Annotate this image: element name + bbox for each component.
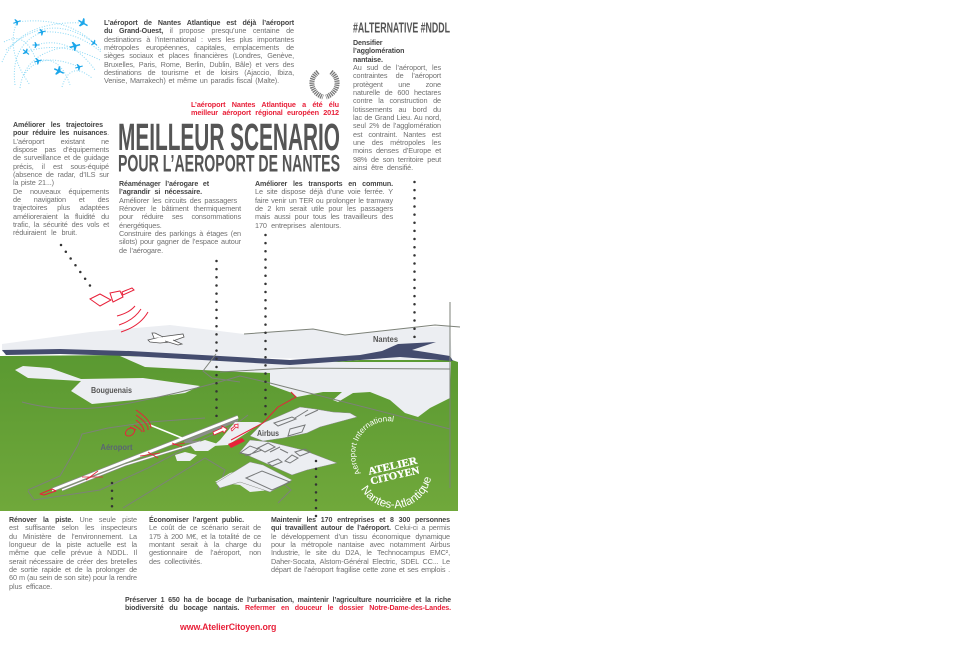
text: aérogare: Réaménager l’aérogare et	[119, 180, 209, 188]
map: radar icon	[124, 410, 151, 438]
text: trajectoires: trafic, la sécurité des vols et	[13, 220, 109, 229]
text: aérogare: Améliorer les circuits des passagers	[119, 196, 237, 205]
leader line: densifier	[413, 182, 416, 338]
map: north bank land	[2, 325, 452, 362]
leader line: transports	[264, 235, 267, 416]
text: trajectoires: L’aéroport existant ne	[13, 137, 109, 146]
text: best airport award: meilleur aéroport régional européen 2012	[191, 108, 339, 117]
text: aérogare: de l’aérogare.	[119, 246, 163, 255]
leader line: piste	[111, 483, 113, 514]
text: aérogare: énergétiques.	[119, 221, 162, 230]
text: Grand-Ouest airport	[104, 19, 294, 85]
text: website: www.AtelierCitoyen.org	[180, 622, 276, 632]
label: Nantes: Nantes	[373, 335, 399, 344]
text: trajectoires: pour réduire les nuisances.	[13, 128, 109, 137]
text: transports: Améliorer les transports en commun.	[255, 180, 393, 188]
text: piste	[9, 515, 138, 591]
text: densifier: protègent une zone	[353, 80, 441, 89]
text: Grand-Ouest airport: destinations à l’international : vers les plus importantes	[104, 35, 294, 44]
text: densifier: lac de Grand Lieu. Au nord,	[353, 113, 441, 122]
text: argent public: gestionnaire de l’aéroport, non	[149, 548, 261, 557]
map: business park	[240, 440, 337, 475]
text: Grand-Ouest airport: Bruxelles, Paris, Rome, Berlin, Dublin, Bâle) et vers des	[104, 60, 294, 69]
title: MEILLEUR SCENARIO	[118, 117, 340, 159]
text: Grand-Ouest airport: destinations de tourisme et de loisirs (Ajaccio, Ibiza,	[104, 68, 294, 77]
text: densifier: 98% de son territoire peut	[353, 155, 441, 164]
text: Grand-Ouest airport: Venise, Marrakech) et même un paradis fiscal (Malte).	[104, 76, 279, 85]
map: urban area south of river	[120, 356, 451, 417]
text: piste: du Ministère de l’environnement. La	[9, 532, 137, 541]
text: piste: serait nécessaire de créer des bretelles	[9, 557, 137, 566]
icon: satellite	[90, 288, 148, 332]
text: Grand-Ouest airport: sièges sociaux et places financières (Londres, Genève,	[104, 51, 294, 60]
text: aérogare: silots) pour gagner de l’espace autour	[119, 237, 241, 246]
title: POUR L’AEROPORT DE NANTES	[118, 150, 340, 178]
label: Bouguenais: Bouguenais	[91, 386, 132, 395]
leader line: entreprises	[315, 461, 317, 516]
stamp: Atelier Citoyen: Aeroport International	[350, 416, 394, 474]
map: runway	[40, 417, 238, 495]
text: trajectoires: (absence de radar, d’ILS sur	[13, 170, 109, 179]
label: Airbus: Airbus	[257, 429, 279, 438]
map: river Loire	[2, 342, 453, 365]
text: entreprises: Industrie, le site du D2A, le Technocampus EMC²,	[271, 548, 450, 557]
map: aerogare area	[175, 407, 357, 492]
label: Aéroport: Aéroport	[100, 443, 133, 452]
text: argent public: Économiser l’argent public.	[149, 516, 244, 524]
text: best airport award	[191, 100, 339, 117]
text: argent public: 175 à 200 M€, et la totalité de ce	[149, 532, 261, 541]
text: densifier: une des métropoles les	[353, 138, 441, 147]
text: entreprises: départ de l’aéroport fragilise cette zone et ses emplois .	[271, 565, 450, 574]
text: piste: de sortie rapide et de la prolonger de	[9, 565, 137, 574]
map: Airbus site	[250, 407, 357, 441]
text: trajectoires: réduiraient le bruit.	[13, 228, 77, 237]
text: densifier: est contraint. Nantes est	[353, 130, 441, 139]
text: densifier	[353, 39, 442, 172]
text: densifier: ainsi être densifié.	[353, 163, 413, 172]
stamp: Atelier Citoyen: Nantes-Atlantique	[361, 477, 431, 508]
text: trajectoires	[13, 121, 110, 237]
text: densifier: Densifier	[353, 39, 382, 47]
map	[0, 302, 460, 511]
icon: satellite waves	[117, 306, 148, 332]
text: transports: mais aussi pour tous les travailleurs des	[255, 212, 393, 221]
text: argent public: Le coût de ce scénario serait de	[149, 523, 261, 532]
leader lines	[61, 182, 414, 516]
text: piste: 60 m (au sein de son site) pour la rendre	[9, 573, 137, 582]
text: piste: est suffisante selon les inspecteurs	[9, 523, 137, 532]
hashtag heading: #ALTERNATIVE #NDDL	[353, 20, 450, 36]
text: densifier: naturelle de 600 hectares	[353, 88, 441, 97]
text: argent public: des collectivités.	[149, 557, 202, 566]
text: trajectoires: trajectoires plus adaptées	[13, 203, 109, 212]
text: transports: faire venir un TER ou prolonger le tramway	[255, 196, 393, 205]
text: densifier: nantaise.	[353, 56, 383, 64]
text: argent public: montant serait à la charge du	[149, 540, 261, 549]
text: entreprises: qui travaillent autour de l’aéroport. Celui-ci a permis	[271, 523, 450, 532]
map: airplane outline	[148, 333, 184, 345]
text: densifier: contraintes de l’aéroport	[353, 71, 441, 80]
leader line: aérogare	[215, 261, 218, 418]
text: trajectoires: la piste 21...)	[13, 178, 54, 187]
icon: flight routes map	[2, 16, 101, 88]
map: southern buildings zone	[216, 462, 292, 492]
text: argent public	[149, 516, 261, 566]
text: Grand-Ouest airport: du Grand-Ouest, il propose presqu’une centaine de	[104, 26, 294, 35]
text: trajectoires: Améliorer les trajectoires	[13, 121, 103, 129]
text: aérogare: Rénover le bâtiment thermiquement	[119, 204, 241, 213]
text: entreprises: Maintenir les 170 entreprises et 8 300 personnes	[271, 516, 450, 524]
text: trajectoires: dispose pas d’équipements	[13, 145, 109, 154]
stamp: Atelier Citoyen: CITOYEN	[369, 465, 421, 487]
text: densifier: l’agglomération	[353, 47, 404, 55]
text: conclusion: Préserver 1 650 ha de bocage de l’urbanisation, maintenir l’agriculture nourricière et la riche	[125, 596, 451, 604]
text: aérogare: l’agrandir si nécessaire.	[119, 188, 202, 196]
text: conclusion	[125, 596, 451, 612]
text: transports: 170 entreprises alentours.	[255, 221, 341, 230]
map: Bouguenais district	[15, 366, 200, 404]
title	[118, 117, 340, 178]
text: entreprises	[271, 516, 450, 574]
text: trajectoires: amélioreraient la fluidité du	[13, 212, 109, 221]
text: transports	[255, 180, 394, 230]
map: terminal and rail link in red	[213, 392, 296, 448]
map labels	[91, 335, 399, 452]
icon: laurel wreath	[312, 72, 337, 97]
stamp: Atelier Citoyen	[350, 416, 431, 508]
text: Grand-Ouest airport: L’aéroport de Nantes Atlantique est déjà l’aéroport	[104, 19, 294, 27]
text: trajectoires: De nouveaux équipements	[13, 187, 109, 196]
text: entreprises: pour la métropole nantaise avec notamment Airbus	[271, 540, 450, 549]
stamp: Atelier Citoyen: ATELIER	[367, 456, 419, 478]
text: aérogare: Construire des parkings à étages (en	[119, 229, 241, 238]
leader line: trajectoires	[61, 245, 91, 287]
text: trajectoires: de surveillance et de guidage	[13, 153, 109, 162]
text: piste: même que celle prévue à NDDL. Il	[9, 548, 137, 557]
text: transports: Le site dispose déjà d’une voie ferrée. Y	[255, 187, 393, 196]
text: densifier: contre la construction de	[353, 96, 441, 105]
text: Grand-Ouest airport: métropoles européennes, capitales, emplacements de	[104, 43, 294, 52]
text: trajectoires: précis, il est sous-équipé	[13, 162, 109, 171]
map: green countryside	[0, 355, 458, 511]
text: piste: plus efficace.	[9, 582, 52, 591]
text: transports: de 2 km serait utile pour les passagers	[255, 204, 393, 213]
text: entreprises: Daher-Socata, Alstom-Général Electric, SDEL CC... Le	[271, 557, 450, 566]
map: roads	[22, 302, 460, 508]
text: aérogare: pour réduire ses consommations	[119, 212, 241, 221]
text: piste: Rénover la piste. Une seule piste	[9, 515, 137, 524]
text: piste: longueur de la piste actuelle est la	[9, 540, 137, 549]
text: aérogare	[119, 180, 242, 255]
text: trajectoires: de navigation et des	[13, 195, 109, 204]
text: best airport award: L’aéroport Nantes Atlantique a été élu	[191, 100, 339, 109]
text: conclusion: biodiversité du bocage nantais. Refermer en douceur le dossier Notre-Dame-des-Landes.	[125, 604, 451, 612]
text: entreprises: le développement d’un tissu économique dynamique	[271, 532, 450, 541]
text: densifier: moins denses d’Europe et	[353, 146, 441, 155]
text: densifier: lotissements au bord du	[353, 105, 441, 114]
text: densifier: Au sud de l’aéroport, les	[353, 63, 441, 72]
text: densifier: seul 2% de l’agglomération	[353, 121, 441, 130]
